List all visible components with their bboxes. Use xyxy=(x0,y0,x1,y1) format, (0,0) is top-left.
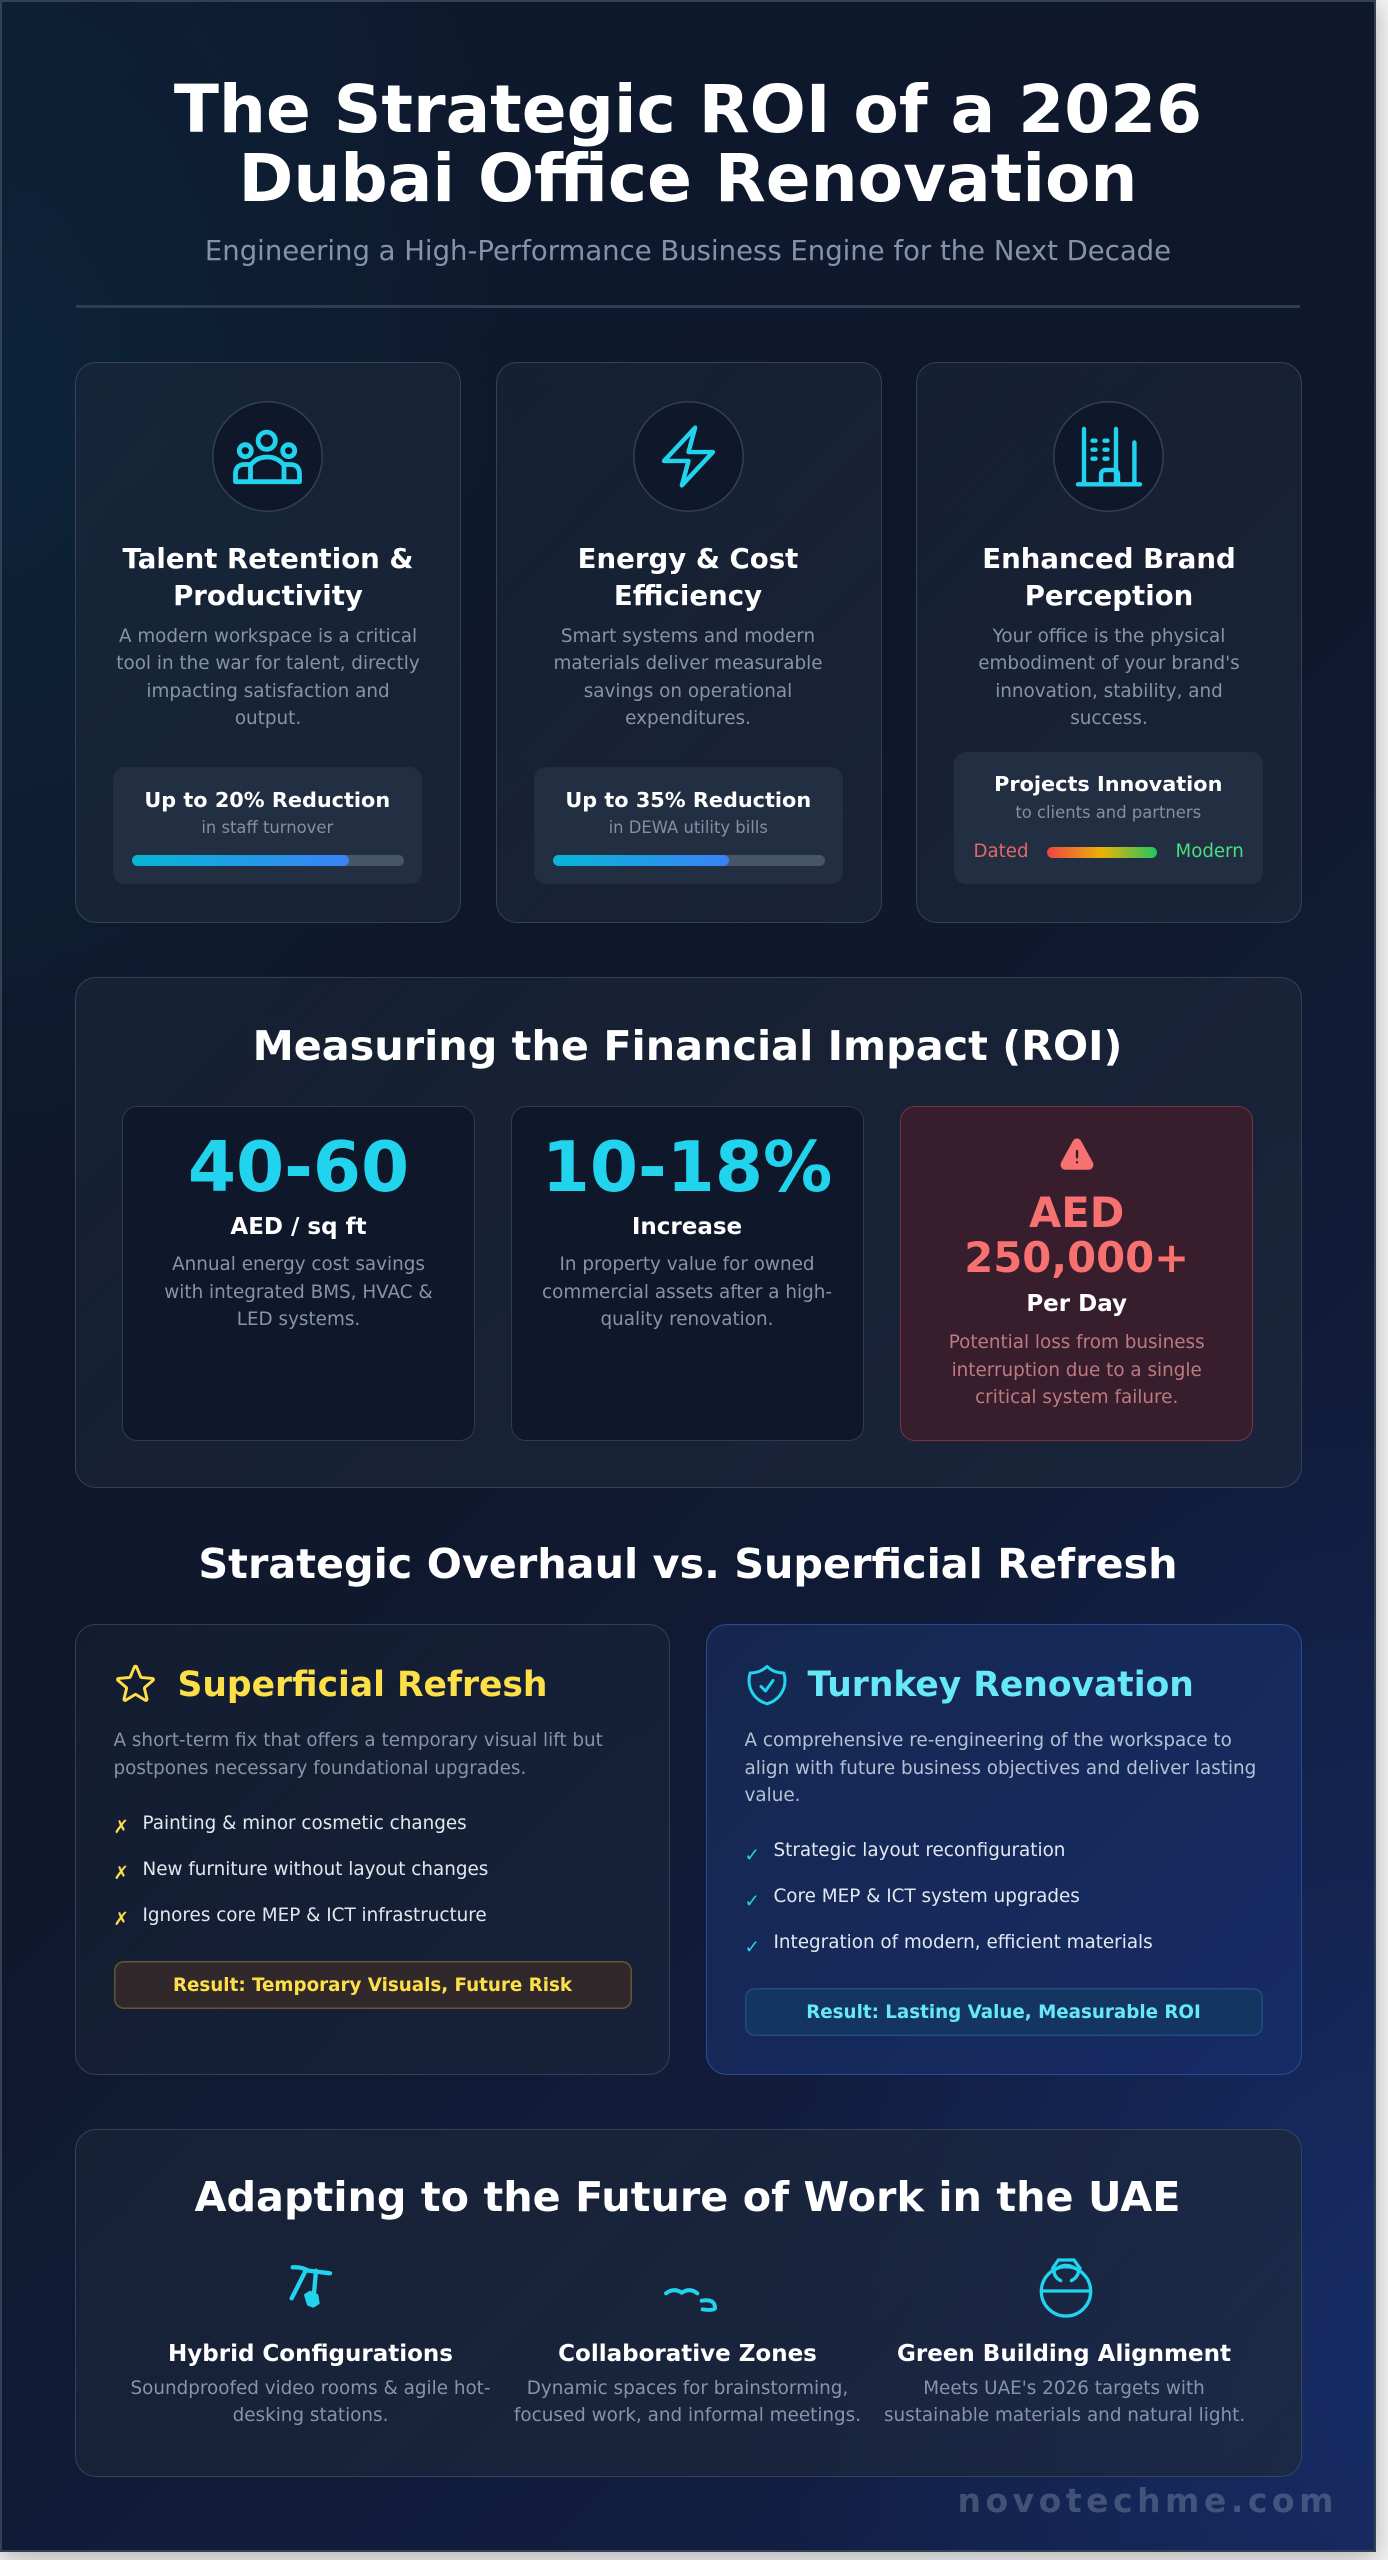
stat description: commercial assets after a high- xyxy=(542,1282,832,1303)
card heading: Productivity xyxy=(173,579,363,612)
feature: collaborative zones xyxy=(514,2288,861,2426)
icon: people group xyxy=(212,400,322,512)
list item: New furniture without layout changes xyxy=(142,1859,488,1880)
list: turnkey benefits: ✓ xyxy=(744,1891,760,1912)
panel description: A short-term fix that offers a temporary visual lift but xyxy=(114,1730,603,1751)
gradient scale bar xyxy=(1046,846,1157,858)
feature description: Dynamic spaces for brainstorming, xyxy=(527,2378,848,2398)
metric box: innovation scale xyxy=(954,752,1262,884)
result callout: Result: Temporary Visuals, Future Risk xyxy=(173,1974,572,1996)
stat description xyxy=(164,1254,433,1330)
title: The Strategic ROI of a 2026 xyxy=(174,71,1202,148)
card description: materials deliver measurable xyxy=(554,653,822,674)
metric value: Projects Innovation xyxy=(994,772,1222,796)
panel heading: Turnkey Renovation xyxy=(808,1664,1194,1704)
list item: Strategic layout reconfiguration xyxy=(774,1840,1065,1861)
stat description: Potential loss from business xyxy=(949,1332,1205,1353)
list: turnkey benefits xyxy=(744,1840,1153,1958)
list: refresh limitations: ✗ xyxy=(114,1909,129,1930)
card description: Smart systems and modern xyxy=(561,626,815,646)
card heading: Enhanced Brand xyxy=(982,542,1236,575)
card description: savings on operational xyxy=(584,681,792,702)
section heading: Measuring the Financial Impact (ROI) xyxy=(253,1022,1122,1070)
result callout xyxy=(114,1960,632,2008)
icon: lightning bolt xyxy=(632,400,744,512)
panel description xyxy=(114,1730,603,1779)
stat number: 10-18% xyxy=(542,1128,832,1208)
panel: brand perception xyxy=(916,362,1302,922)
feature description xyxy=(514,2378,861,2426)
card description: output. xyxy=(235,708,301,729)
stat card: energy savings xyxy=(122,1106,475,1441)
feature: green building xyxy=(884,2258,1245,2426)
panel: future of work xyxy=(74,2128,1302,2476)
scale label: modern: Modern xyxy=(1176,841,1244,862)
stat number xyxy=(964,1188,1189,1282)
stat description xyxy=(949,1332,1205,1408)
icon: star xyxy=(116,1664,155,1702)
feature: hybrid configurations xyxy=(130,2265,490,2426)
feature title: Hybrid Configurations xyxy=(168,2340,453,2366)
stat card: property value xyxy=(510,1106,864,1441)
stat description: LED systems. xyxy=(237,1309,360,1330)
card heading xyxy=(122,542,413,612)
list item: Integration of modern, efficient materials xyxy=(774,1932,1153,1953)
stat description: In property value for owned xyxy=(560,1254,814,1275)
metric caption: in DEWA utility bills xyxy=(609,818,768,837)
card heading: Efficiency xyxy=(614,579,762,612)
icon: building xyxy=(1052,400,1164,512)
card heading xyxy=(578,542,798,612)
stat description xyxy=(542,1254,832,1330)
section heading: Adapting to the Future of Work in the UAE xyxy=(194,2173,1181,2221)
stat card: downtime risk xyxy=(900,1106,1253,1441)
list: refresh limitations: ✗ xyxy=(114,1863,129,1884)
metric caption: to clients and partners xyxy=(1015,802,1201,822)
card heading xyxy=(982,542,1236,612)
metric value: Up to 20% Reduction xyxy=(144,788,390,812)
panel heading: Superficial Refresh xyxy=(178,1665,547,1705)
title xyxy=(174,71,1202,216)
card heading: Energy & Cost xyxy=(578,542,798,575)
feature title: Collaborative Zones xyxy=(558,2340,817,2366)
stat number: 40-60 xyxy=(188,1128,409,1208)
feature description: desking stations. xyxy=(233,2405,388,2426)
list item: Ignores core MEP & ICT infrastructure xyxy=(142,1905,487,1926)
metric value: Up to 35% Reduction xyxy=(565,788,811,812)
card description: tool in the war for talent, directly xyxy=(116,653,420,674)
list item: Core MEP & ICT system upgrades xyxy=(774,1886,1080,1907)
stat number: 250,000+ xyxy=(964,1233,1189,1282)
feature description xyxy=(130,2378,490,2426)
list item: Painting & minor cosmetic changes xyxy=(142,1813,467,1834)
feature description xyxy=(884,2378,1245,2426)
panel description: postpones necessary foundational upgrades. xyxy=(114,1758,526,1779)
stat description: interruption due to a single xyxy=(952,1360,1202,1381)
metric box: staff turnover xyxy=(113,767,422,884)
list: refresh limitations xyxy=(114,1813,488,1930)
stat description: Annual energy cost savings xyxy=(172,1254,425,1275)
card description xyxy=(554,626,822,729)
stat unit: AED / sq ft xyxy=(230,1214,367,1240)
panel: talent retention xyxy=(74,362,460,922)
panel description xyxy=(744,1730,1256,1806)
panel description: align with future business objectives and deliver lasting xyxy=(744,1758,1256,1779)
metric box: utility bills xyxy=(534,767,842,884)
icon: green building xyxy=(1040,2258,1092,2318)
metric caption: in staff turnover xyxy=(201,818,333,837)
panel description: A comprehensive re-engineering of the workspace to xyxy=(744,1730,1232,1751)
title: Dubai Office Renovation xyxy=(238,140,1137,216)
stat description: critical system failure. xyxy=(975,1387,1178,1408)
list: turnkey benefits: ✓ xyxy=(744,1845,760,1866)
card description: innovation, stability, and xyxy=(995,681,1223,702)
icon: collaboration xyxy=(664,2288,717,2312)
card description: embodiment of your brand's xyxy=(978,653,1240,674)
icon: shield check xyxy=(748,1664,786,1706)
stat description: with integrated BMS, HVAC & xyxy=(164,1282,433,1303)
card description: success. xyxy=(1070,708,1148,729)
card heading: Talent Retention & xyxy=(123,542,413,575)
stat unit: Increase xyxy=(632,1214,742,1240)
panel: financial impact xyxy=(74,977,1302,1488)
stat description: quality renovation. xyxy=(601,1309,773,1330)
scale label: dated: Dated xyxy=(974,841,1029,862)
section heading: comparison: Strategic Overhaul vs. Superficial Refresh xyxy=(198,1540,1178,1588)
result callout xyxy=(744,1988,1262,2036)
card description xyxy=(116,626,420,729)
stat number: AED xyxy=(1029,1188,1124,1237)
card description: expenditures. xyxy=(625,708,751,729)
feature title: Green Building Alignment xyxy=(897,2340,1231,2366)
feature description: Soundproofed video rooms & agile hot- xyxy=(130,2378,490,2398)
card heading: Perception xyxy=(1025,579,1193,612)
list: refresh limitations: ✗ xyxy=(114,1817,129,1838)
card description: impacting satisfaction and xyxy=(146,681,390,702)
progress bar 65% xyxy=(552,854,824,866)
list: turnkey benefits: ✓ xyxy=(744,1937,760,1958)
progress bar 80% xyxy=(132,854,404,866)
stat unit: Per Day xyxy=(1026,1291,1127,1317)
feature description: Meets UAE's 2026 targets with xyxy=(923,2378,1205,2398)
panel description: value. xyxy=(744,1785,800,1806)
subtitle: Engineering a High-Performance Business Engine for the Next Decade xyxy=(205,235,1171,267)
panel: turnkey renovation xyxy=(706,1624,1302,2075)
feature description: sustainable materials and natural light. xyxy=(884,2405,1245,2426)
panel: energy and cost xyxy=(496,362,882,922)
watermark: novotechme.com xyxy=(958,2481,1338,2520)
card description: Your office is the physical xyxy=(993,626,1225,646)
card description xyxy=(978,626,1240,729)
card description: A modern workspace is a critical xyxy=(119,626,417,646)
panel: superficial refresh xyxy=(74,1624,670,2075)
result callout: Result: Lasting Value, Measurable ROI xyxy=(806,2002,1201,2022)
icon: warning triangle xyxy=(1060,1138,1094,1170)
feature description: focused work, and informal meetings. xyxy=(514,2405,861,2426)
icon: hybrid xyxy=(290,2265,332,2308)
